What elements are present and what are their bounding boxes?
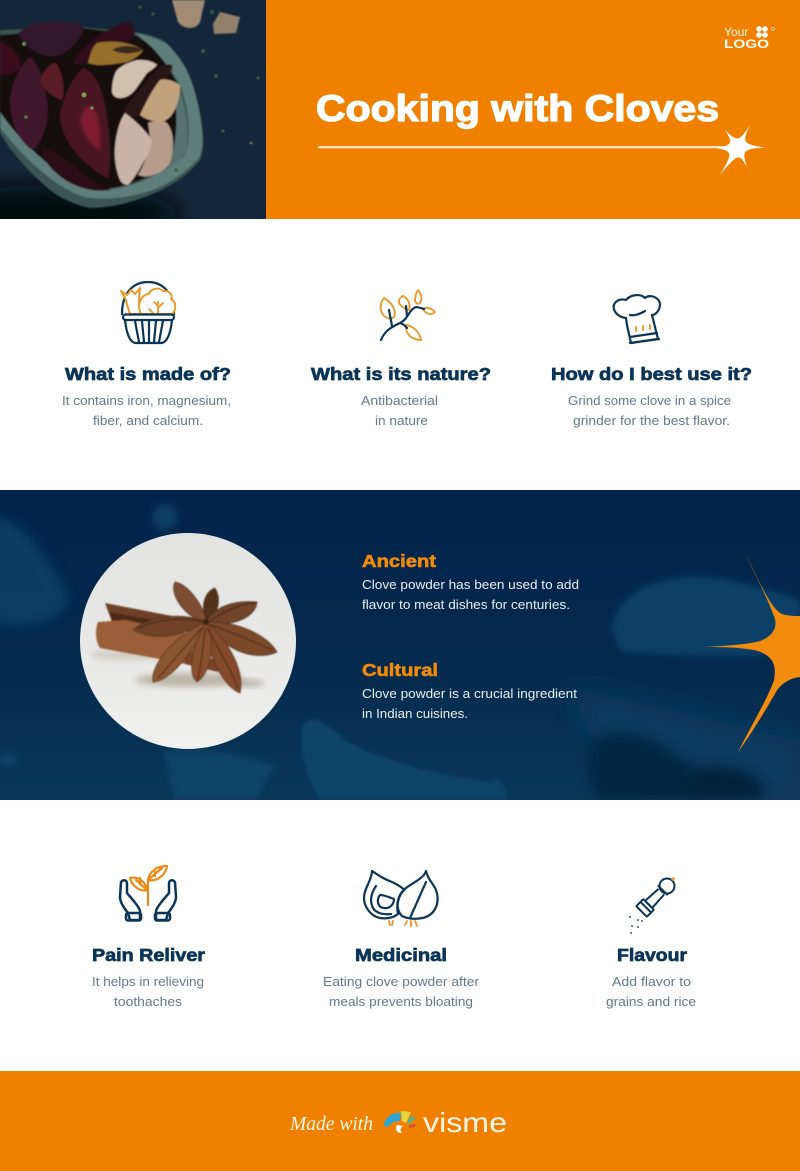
text: how do i best use it: grinder for the best flavor.	[573, 413, 730, 428]
text: made with: Made with	[289, 1113, 373, 1135]
icon: large orange sparkle	[705, 553, 800, 752]
background: blurred garlic photo	[0, 490, 800, 800]
heading: flavour: Flavour	[617, 945, 687, 965]
text: what is made of	[62, 393, 231, 428]
logo placeholder: LOGO	[724, 37, 769, 51]
icon: garlic bulbs	[364, 871, 438, 926]
heading: what is made of: What is made of?	[65, 364, 231, 384]
text: medicinal: Eating clove powder after	[323, 974, 480, 989]
panel: dark section	[0, 490, 800, 800]
text: pain reliver: toothaches	[114, 994, 183, 1009]
cinnamon sticks	[105, 603, 172, 630]
text: what is its nature	[361, 393, 438, 428]
heading: how do i best use it: How do I best use it?	[551, 364, 752, 384]
text: how do i best use it: Grind some clove in a spice	[568, 393, 731, 408]
text: ancient	[362, 551, 579, 612]
text: medicinal	[323, 974, 480, 1009]
text: what is its nature: Antibacterial	[361, 393, 438, 408]
text: how do i best use it	[568, 393, 731, 428]
heading: pain reliver: Pain Reliver	[92, 945, 205, 965]
title: Cooking with Cloves	[316, 88, 719, 129]
text: ancient: Ancient	[362, 551, 436, 571]
text: ancient: Clove powder has been used to add	[362, 577, 579, 592]
logo placeholder	[724, 25, 774, 51]
text: flavour: Add flavor to	[612, 974, 691, 989]
text: pain reliver	[92, 974, 204, 1009]
text: flavour: grains and rice	[606, 994, 696, 1009]
text: pain reliver: It helps in relieving	[92, 974, 204, 989]
footer band	[0, 1071, 800, 1171]
heading: what is its nature: What is its nature?	[311, 364, 491, 384]
text: visme wordmark: visme	[423, 1107, 507, 1138]
text: medicinal: meals prevents bloating	[329, 994, 473, 1009]
icon: basket of vegetables	[121, 282, 175, 343]
bowl interior shadow	[0, 28, 188, 190]
heading: medicinal: Medicinal	[355, 945, 447, 965]
text: flavour	[606, 974, 696, 1009]
star anise petals	[133, 582, 277, 693]
panel: bottom three facts	[92, 866, 696, 1009]
beets	[18, 21, 83, 56]
logo placeholder: Your	[724, 25, 748, 39]
text: cultural: Cultural	[362, 660, 438, 680]
text: cultural	[362, 660, 577, 721]
panel: top three facts	[62, 282, 752, 428]
text: ancient: flavor to meat dishes for centuries.	[362, 597, 570, 612]
bowl outer	[0, 27, 203, 208]
bowl rim and inner wall	[0, 33, 202, 199]
icon: pepper mill	[629, 875, 678, 934]
text: what is its nature: in nature	[375, 413, 428, 428]
garlic cloves	[88, 42, 143, 65]
title underline with sparkle	[318, 125, 765, 175]
text: what is made of: fiber, and calcium.	[93, 413, 203, 428]
icon: chef hat	[614, 295, 660, 343]
hero photo: bowl of beet chips and garlic	[0, 0, 266, 219]
text: what is made of: It contains iron, magnesium,	[62, 393, 231, 408]
icon: hands holding seedling	[120, 866, 176, 920]
photo: cinnamon and star anise in circle	[80, 533, 296, 749]
icon: visme logo	[384, 1111, 416, 1133]
text: cultural: in Indian cuisines.	[362, 706, 468, 721]
header banner	[266, 0, 800, 219]
icon: herb branch	[381, 290, 435, 340]
text: cultural: Clove powder is a crucial ingredient	[362, 686, 577, 701]
